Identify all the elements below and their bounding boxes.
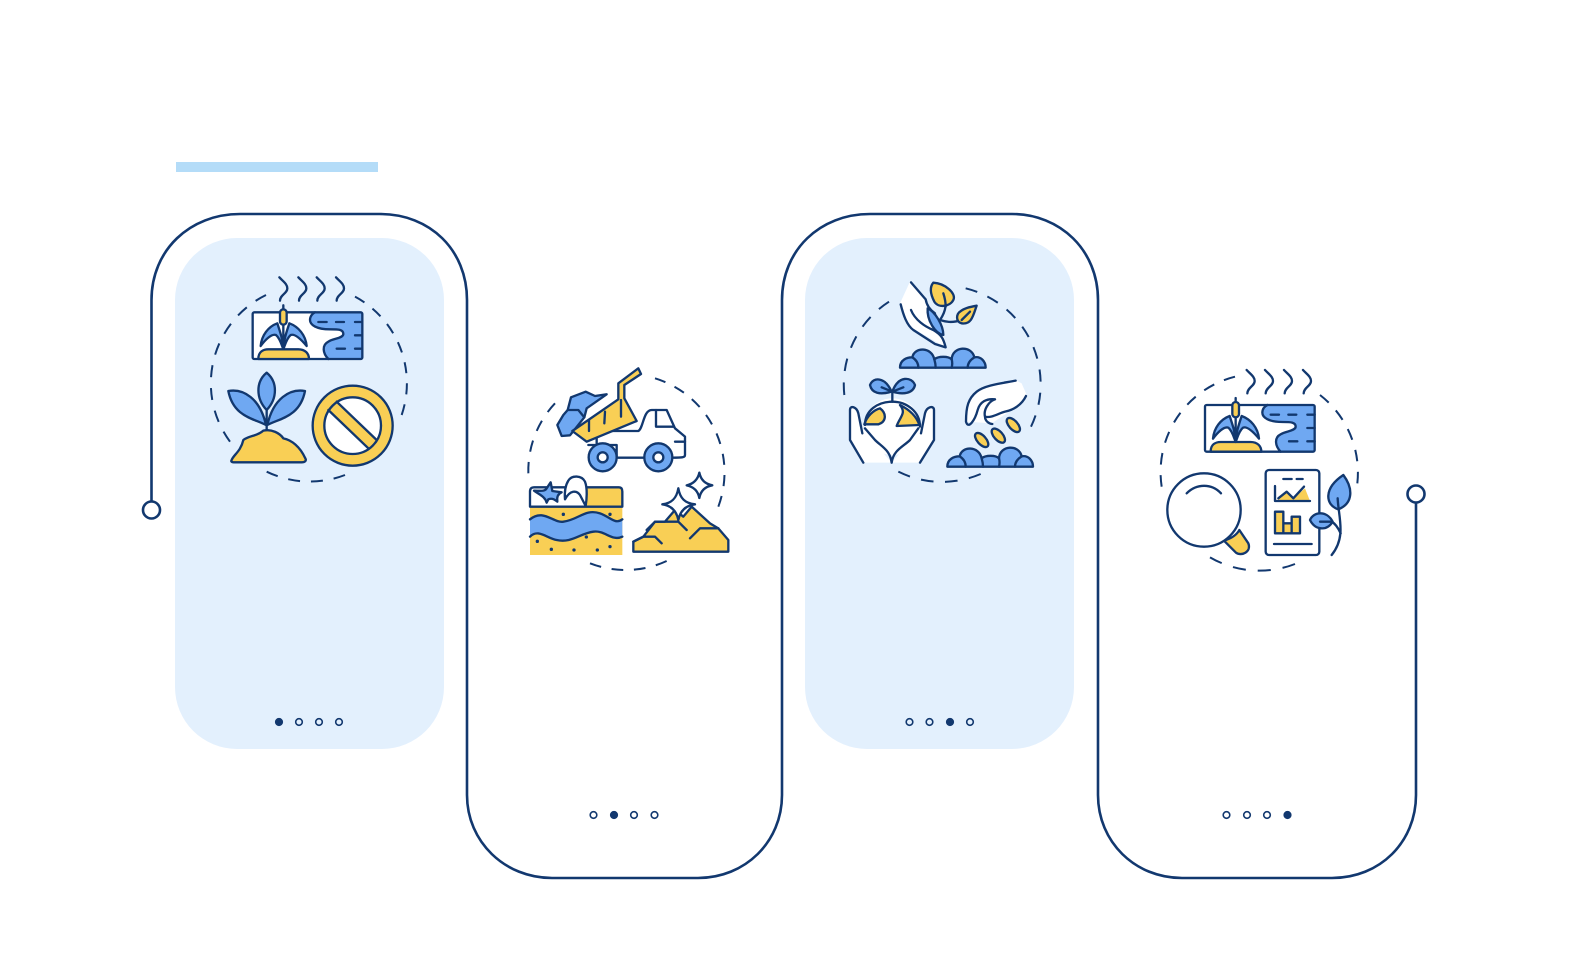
dashed ring: [211, 295, 407, 482]
clean sand hills with sparkles: [633, 473, 728, 552]
icon: step 4 wetland monitoring: [1161, 370, 1358, 571]
icon: step 1 wetland plant prohibited: [211, 277, 407, 482]
title placeholder bar: [176, 162, 378, 172]
prohibition sign: [313, 386, 393, 466]
wetland scene: [253, 305, 362, 359]
magnifying glass: [1167, 473, 1249, 554]
pagination dots: step 3: [906, 719, 973, 725]
connecting serpentine outline: [152, 214, 1416, 878]
start node: [143, 502, 160, 518]
sprout on soil mound: [228, 373, 306, 462]
end node: [1408, 486, 1424, 502]
pagination dots: step 2: [590, 812, 658, 818]
dashed ring: [844, 288, 1041, 482]
hand sowing seeds: [947, 381, 1033, 467]
wetland scene: [1205, 398, 1315, 452]
dashed ring: [1161, 377, 1358, 571]
soil cross section: [530, 477, 622, 555]
panel: step 3 background: [805, 238, 1074, 749]
icon: step 3 planting and seeding: [844, 282, 1041, 482]
heat waves: [279, 277, 344, 301]
heat waves: [1247, 370, 1311, 393]
dashed ring: [528, 378, 725, 570]
report with charts: [1266, 470, 1319, 555]
hand planting seedling: [900, 282, 986, 368]
leaf sprig: [1310, 475, 1350, 555]
panel: step 1 background: [175, 238, 444, 749]
hands holding globe with sprout: [850, 379, 934, 463]
pagination dots: step 4: [1223, 812, 1291, 818]
dump truck: [557, 368, 685, 471]
icon: step 2 dump truck and soil: [528, 368, 728, 570]
pagination dots: step 1: [276, 719, 342, 725]
